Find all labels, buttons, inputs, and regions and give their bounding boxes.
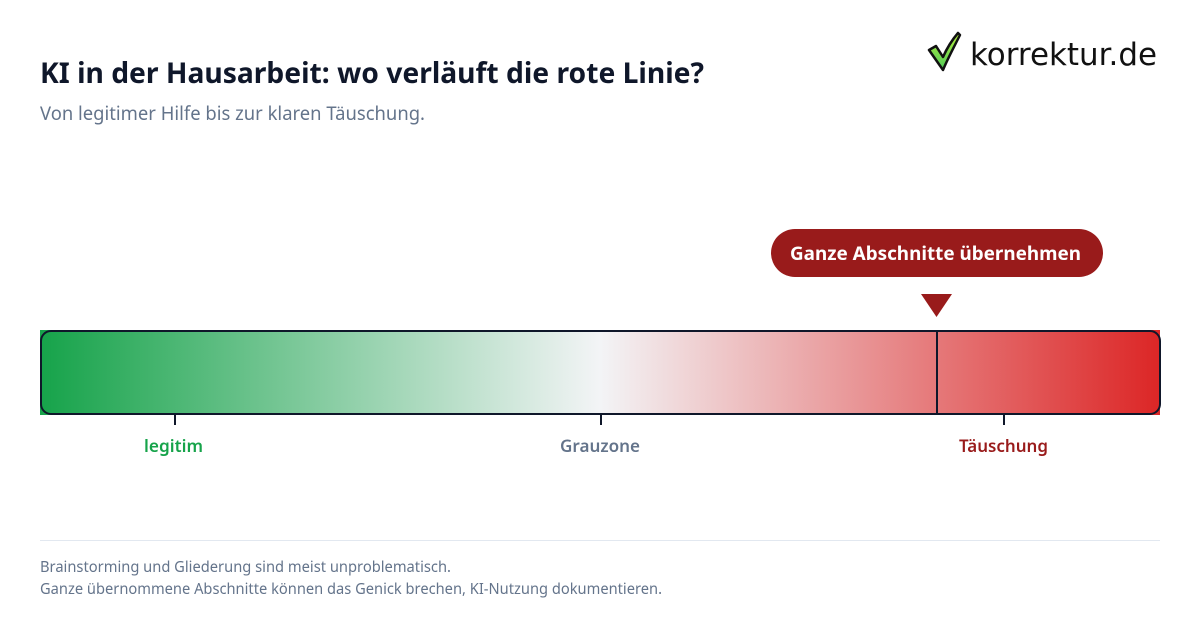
scale tick: Grauzone	[560, 414, 640, 457]
gradient scale bar	[40, 330, 1160, 415]
scale tick: Grauzone: Grauzone	[560, 434, 640, 457]
callout: current position label: Ganze Abschnitte übernehmen	[790, 240, 1081, 266]
position line	[936, 331, 938, 414]
title: KI in der Hausarbeit: wo verläuft die rote Linie?	[40, 53, 704, 92]
scale tick: legitim	[144, 414, 203, 457]
callout: current position label	[771, 229, 1103, 277]
logo: korrektur.de	[929, 33, 1157, 73]
marker arrow	[921, 294, 952, 317]
icon: check mark	[929, 33, 960, 70]
footer note: Brainstorming und Gliederung sind meist unproblematisch.	[40, 557, 451, 577]
scale tick: Täuschung	[959, 414, 1048, 457]
footer note	[40, 557, 662, 599]
footer note: Ganze übernommene Abschnitte können das Genick brechen, KI-Nutzung dokumentieren.	[40, 579, 662, 599]
scale tick: legitim: legitim	[144, 434, 203, 457]
logo wordmark: korrektur.de	[970, 37, 1157, 73]
subtitle: Von legitimer Hilfe bis zur klaren Täuschung.	[40, 100, 425, 126]
scale tick: Täuschung: Täuschung	[959, 434, 1048, 457]
